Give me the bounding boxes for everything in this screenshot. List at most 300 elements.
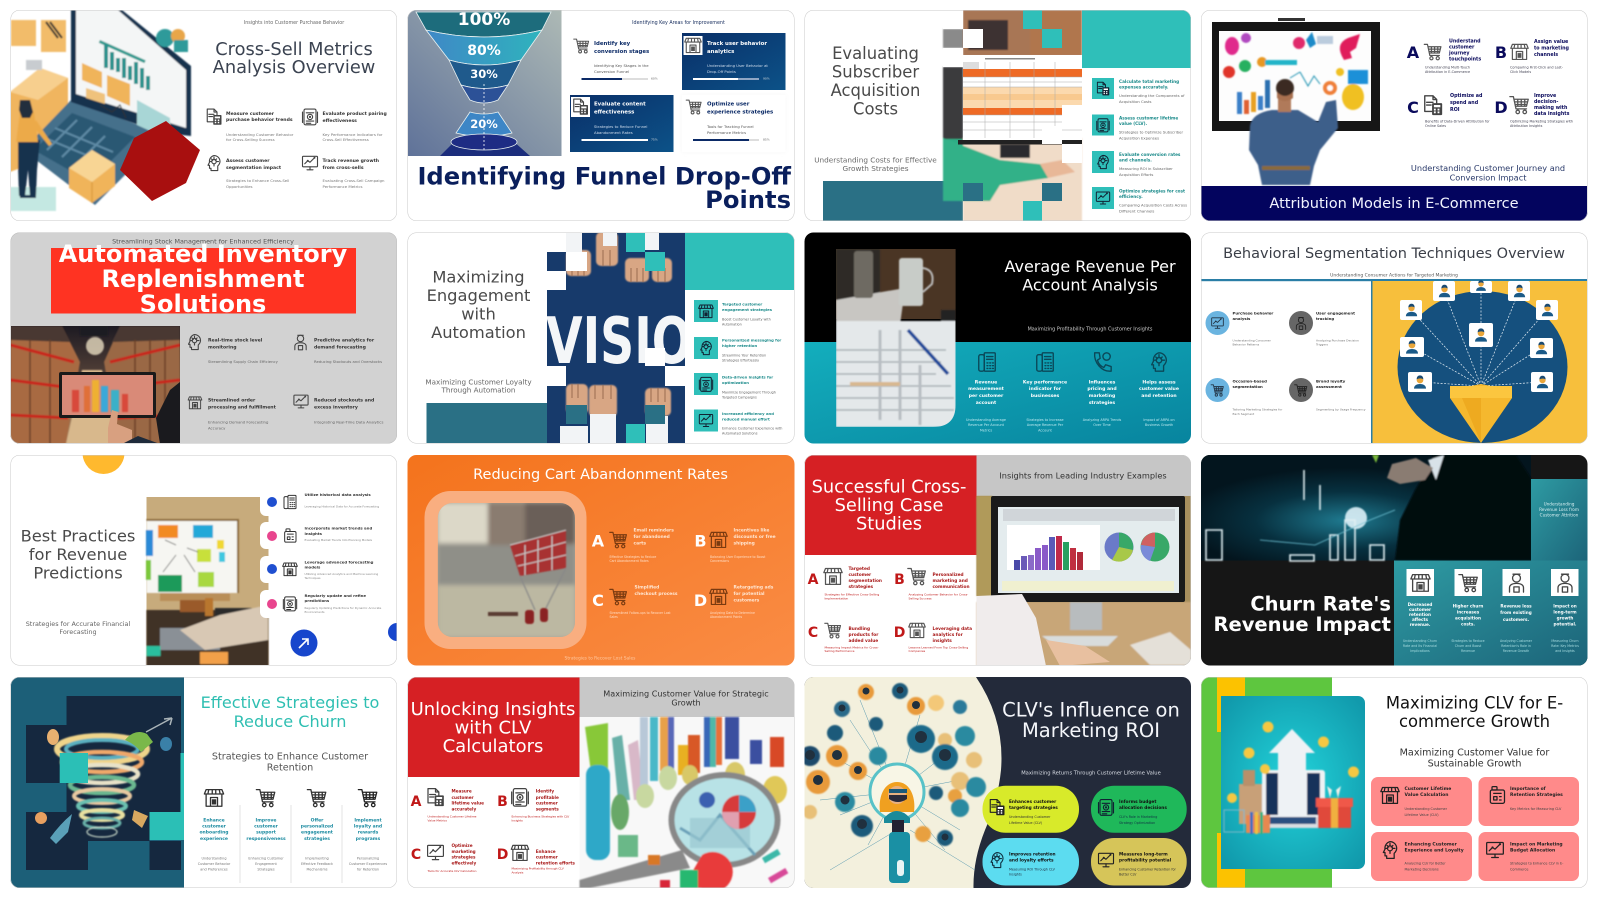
panel: user experience strategies: 85%: [763, 138, 770, 142]
panel: churn effects: from existing: [1500, 610, 1532, 615]
slide card: Behavioral Segmentation Techniques Overview: [1201, 232, 1588, 444]
list: acquisition cost actions: Evaluate conversion rates: [1119, 152, 1181, 157]
item A: journey touchpoints: journey: [1448, 50, 1470, 56]
title: Subscriber: [832, 62, 919, 82]
column: onboarding: Understanding: [202, 856, 226, 860]
panel: conversion stages: conversion stages: [594, 49, 649, 55]
item: order processing: [188, 397, 277, 430]
column: engagement: personalized: [301, 824, 333, 830]
item B: personalized marketing: Personalized: [932, 572, 964, 578]
pill: budget allocation: [1091, 786, 1187, 833]
title: Average Revenue Per: [1004, 257, 1176, 276]
panel: budget allocation: Impact on Marketing: [1510, 842, 1563, 848]
item: occasion segmentation: Occasion-based: [1232, 378, 1267, 384]
title: Identifying Funnel Drop-Off: [417, 162, 791, 190]
title block: Studies: [856, 514, 922, 534]
list: acquisition cost actions: Acquisition Costs: [1119, 99, 1151, 104]
subtitle: Understanding Costs for Effective: [814, 156, 937, 164]
item B: personalized marketing: B: [894, 572, 905, 588]
photo: analyst at monitor with charts: [976, 496, 1192, 666]
column: key performance indicator: Average Revenue Per: [1027, 423, 1064, 427]
pill: budget allocation: CLV's Role in Marketing: [1119, 815, 1157, 819]
column: engagement: Offer: [311, 818, 324, 824]
list: forecasting practices: insights: [304, 531, 323, 536]
item: purchase behavior: [1206, 310, 1273, 346]
item: segmentation impact: segmentation impact: [226, 165, 282, 171]
item B: incentives: Conversions: [710, 559, 729, 563]
item B: channel value: Click Models: [1510, 70, 1531, 74]
subtitle: [1412, 165, 1564, 182]
panel: user behavior analytics: [682, 33, 786, 90]
list: acquisition cost actions: Comparing Acquisition Costs Across: [1119, 202, 1187, 208]
column: loyalty: for Retention: [357, 868, 379, 872]
title: Maximizing: [432, 268, 525, 286]
column: revenue measurement: Understanding Average: [966, 418, 1006, 422]
panel: customer experience: Enhancing Customer: [1404, 842, 1458, 848]
subtitle block: Growth: [671, 698, 701, 708]
panel: budget allocation: Budget Allocation: [1510, 848, 1555, 854]
title block: [408, 677, 580, 777]
subtitle: Sustainable Growth: [1428, 758, 1521, 770]
item D: retention efforts: [497, 845, 575, 874]
title block: with CLV: [455, 718, 532, 738]
pill: long-term profitability: Enhancing Customer Retention for: [1119, 868, 1177, 872]
subtitle: Strategies to Enhance Customer: [212, 752, 368, 762]
shape: teal corner block: [685, 232, 795, 290]
panel: subtitle: Revenue Loss from: [1539, 507, 1579, 512]
item: occasion segmentation: [1206, 378, 1283, 416]
item D: data analytics: Lessons Learned From Top Cross-Selling: [908, 646, 968, 650]
column: revenue measurement: Revenue: [975, 380, 997, 386]
column: customer value: Impact of ARPA on: [1143, 418, 1175, 422]
panel: churn effects: acquisition: [1455, 616, 1481, 620]
item D: retention efforts: Enhance: [536, 849, 556, 854]
item D: decision making: making with: [1534, 105, 1568, 111]
item C: bundling: added value: [848, 638, 878, 644]
list: forecasting practices: Regularly update and refine: [304, 593, 366, 598]
icon: documents: [207, 109, 222, 125]
column: loyalty: rewards: [358, 830, 379, 836]
item A: email reminders: carts: [634, 540, 646, 546]
item: purchase behavior trends: Measure customer: [226, 111, 275, 117]
panel: content effectiveness: [570, 95, 674, 152]
pill: targeting strategies: [982, 786, 1079, 833]
item C: marketing strategies: Tools for Accurate CLV Calculation: [426, 869, 477, 873]
column: loyalty: loyalty and: [354, 824, 382, 830]
column: pricing strategies: Analyzing ARPA Trends: [1083, 418, 1121, 422]
column: onboarding: onboarding: [199, 830, 229, 836]
list: acquisition cost actions: efficiency.: [1119, 194, 1143, 199]
photo: warehouse with tablet: [10, 326, 180, 444]
title: [21, 526, 135, 582]
title: [420, 166, 792, 208]
item: segmentation impact: [226, 158, 289, 189]
item B: profitable segments: segments: [536, 806, 559, 812]
item: engagement tracking: Analyzing Purchase Decision: [1316, 338, 1359, 342]
panel: churn effects: Implications: [1410, 649, 1430, 653]
column: support: Enhancing Customer: [248, 856, 284, 860]
subtitle: Understanding Consumer Actions for Targeted Marketing: [1330, 272, 1458, 278]
item C: simplified checkout: Streamlined Follow-ups to Recover Lost: [610, 611, 671, 615]
panel: customer experience: Experience and Loyalty: [1404, 848, 1464, 854]
item: brand loyalty: assessment: [1316, 384, 1342, 389]
panel: churn effects: retention: [1409, 612, 1431, 617]
item: revenue growth: [322, 158, 385, 189]
panel: churn effects: growth: [1557, 616, 1573, 620]
panel: conversion stages: [573, 38, 658, 80]
panel: churn effects: Revenue loss: [1500, 604, 1532, 608]
subtitle: Retention: [267, 762, 313, 774]
item C: bundling: C: [808, 625, 818, 641]
item A: email reminders: Email reminders: [634, 528, 674, 534]
photo: planning whiteboard and laptop: [146, 497, 268, 666]
slide card: Cross-Sell Metrics Analysis Overview: [10, 10, 397, 221]
item D: retargeting ads: for potential: [734, 591, 765, 597]
item A: email reminders: for abandoned: [634, 534, 670, 540]
item B: personalized marketing: communication: [932, 584, 970, 590]
item A: email reminders: Cart Abandonment Rates: [610, 559, 649, 563]
list: automation benefits: Boost Customer Loyalty with: [722, 318, 771, 322]
column: loyalty: Customer Experiences: [349, 862, 387, 866]
title: Reduce Churn: [234, 712, 346, 731]
item: purchase behavior: analysis: [1232, 316, 1251, 321]
list: automation benefits: higher retention: [722, 343, 757, 348]
column: onboarding: experience: [200, 836, 228, 842]
item: demand forecasting: demand forecasting: [314, 344, 366, 350]
column: onboarding: Customer Behavior: [198, 862, 231, 866]
item D: retention efforts: customer: [536, 854, 559, 860]
list: forecasting practices: Leverage advanced forecasting: [304, 560, 374, 564]
item D: retargeting ads: [694, 584, 774, 619]
item: product pairing: [322, 111, 387, 142]
item B: channel value: Assign value: [1534, 39, 1569, 45]
title block: [804, 455, 976, 555]
item: reduced stockouts: [294, 395, 383, 424]
item A: journey touchpoints: [1407, 38, 1481, 74]
item A: lifetime value: [411, 788, 484, 822]
slide card: Churn Rate's Revenue Impact: [1201, 455, 1588, 666]
list: acquisition cost actions: Calculate total marketing: [1119, 79, 1179, 84]
item D: retargeting ads: Analyzing Data to Determine: [710, 611, 755, 615]
column: key performance indicator: Strategies to Increase: [1026, 418, 1064, 422]
list: forecasting practices: Leveraging Historical Data for Accurate Forecasting: [304, 504, 379, 508]
item: product pairing: effectiveness: [322, 118, 357, 124]
subtitle: [1400, 748, 1549, 770]
item A: journey touchpoints: Attribution in E-Commerce: [1425, 70, 1470, 74]
item B: profitable segments: profitable: [536, 795, 559, 800]
pill: long-term profitability: Better CLV: [1119, 872, 1137, 876]
subtitle block: [976, 455, 1192, 496]
list: automation benefits: Personalized messaging for: [722, 338, 781, 342]
panel: content effectiveness: Abandonment Rates: [594, 130, 633, 135]
title: Costs: [853, 100, 898, 118]
illustration: upward arrow, laptop and gifts: [1201, 677, 1365, 888]
panel: conversion stages: Identify key: [594, 41, 631, 47]
subtitle: Maximizing Profitability Through Customer Insights: [1028, 326, 1153, 332]
panel: user experience strategies: Tools for Tracking Funnel: [706, 124, 754, 129]
item C: bundling: Selling Performance: [824, 649, 855, 653]
item: purchase behavior: Purchase behavior: [1232, 310, 1273, 316]
pill: long-term profitability: profitability potential: [1119, 858, 1172, 864]
title: with: [461, 304, 496, 324]
column: key performance indicator: indicator for: [1029, 386, 1062, 392]
item: product pairing: Key Performance Indicators for: [322, 132, 383, 137]
photo: VISION table with hands: VISIO: [546, 305, 692, 379]
panel: churn effects: potential.: [1554, 622, 1577, 626]
panel: budget allocation: Commerce: [1510, 868, 1528, 872]
list: forecasting practices: models: [304, 564, 321, 570]
column: onboarding: [198, 790, 231, 872]
panel: churn effects: Understanding Churn: [1403, 639, 1437, 643]
title: Engagement: [427, 286, 530, 305]
item: reduced stockouts: Integrating Real-Time Data Analytics: [314, 420, 383, 424]
shape: red hexagon: [120, 121, 200, 201]
item C: ad spend: [1407, 93, 1490, 128]
item: stock monitoring: [188, 334, 279, 364]
item C: marketing strategies: marketing: [452, 849, 476, 854]
illustration: isometric laptop analytics scene: [10, 10, 191, 211]
column: engagement: Effective Feedback: [301, 862, 333, 866]
list: forecasting practices: Regularly Updating Predictions for Dynamic Accurate: [304, 606, 381, 610]
column: support: customer: [254, 824, 279, 830]
item: order processing: Enhancing Demand Forecasting: [208, 420, 269, 424]
title: [831, 44, 920, 118]
title: Maximizing CLV for E-: [1386, 694, 1563, 712]
item: order processing: Streamlined order: [208, 398, 256, 404]
item C: ad spend: Optimize ad: [1450, 93, 1483, 99]
item B: profitable segments: [497, 788, 569, 822]
chart: funnel with percentages: [408, 10, 562, 156]
title bar: [1201, 186, 1588, 221]
item: occasion segmentation: Each Segment: [1232, 412, 1255, 416]
panel: retention strategies: Importance of: [1510, 786, 1546, 792]
photo: coloured bars and magnifying glass: [580, 717, 794, 892]
column: customer value: [1139, 353, 1179, 427]
item: stock monitoring: Real-time stock level: [208, 338, 263, 344]
photo: businessman and glowing city chart: [1201, 455, 1531, 561]
subtitle: Streamlining Stock Management for Enhanced Efficiency: [112, 238, 294, 246]
subtitle: Conversion Impact: [1450, 172, 1527, 182]
slide card: Reducing Cart Abandonment Rates: [408, 455, 794, 666]
panel: churn effects: customer: [1409, 607, 1432, 612]
icon: chart monitor: [302, 156, 318, 170]
title banner: Solutions: [140, 290, 266, 318]
list: acquisition cost actions: Acquisition Efforts: [1119, 172, 1153, 177]
item: purchase behavior trends: for Cross-Selling Success: [226, 137, 275, 142]
item D: retargeting ads: customers: [734, 598, 760, 604]
item: segmentation impact: Strategies to Enhance Cross-Sell: [226, 178, 289, 183]
item A: segmentation: segmentation: [848, 578, 882, 584]
panel: churn effects: customers.: [1503, 617, 1530, 622]
item C: simplified checkout: Simplified: [634, 584, 659, 590]
item D: retention efforts: Maximizing Profitability through CLV: [512, 866, 564, 870]
item B: channel value: channels: [1534, 52, 1558, 58]
panel: churn effects: Measuring Churn: [1551, 639, 1579, 643]
icon: board: [302, 109, 318, 125]
item B: incentives: Balancing User Experience to Boost: [710, 555, 766, 559]
item A: journey touchpoints: Understanding Multi-Touch: [1425, 66, 1470, 70]
item A: journey touchpoints: A: [1407, 43, 1420, 62]
panel: retention strategies: Key Metrics for Measuring CLV: [1510, 807, 1562, 811]
item B: channel value: to marketing: [1534, 46, 1570, 52]
item D: decision making: D: [1494, 98, 1508, 117]
item A: segmentation: Targeted: [848, 566, 870, 572]
list: automation benefits: Automated Solutions: [722, 432, 758, 436]
column: customer value: Helps assess: [1142, 380, 1176, 386]
list: acquisition cost actions: and channels.: [1119, 158, 1152, 162]
panel: churn effects: long-term: [1553, 610, 1577, 614]
subtitle block: Insights from Leading Industry Examples: [999, 470, 1167, 480]
item C: marketing strategies: C: [411, 847, 421, 863]
item C: bundling: products for: [848, 632, 879, 638]
item A: lifetime value: Understanding Customer Lifetime: [428, 814, 477, 818]
item D: decision making: Improve: [1534, 93, 1557, 99]
item C: bundling: [808, 623, 879, 653]
list: acquisition cost actions: [1092, 78, 1187, 214]
column: revenue measurement: per customer: [969, 393, 1004, 399]
item: revenue growth: from cross-sells: [322, 165, 364, 171]
panel: lifetime value calculation: [1371, 777, 1472, 826]
column: pricing strategies: pricing and: [1087, 386, 1117, 392]
item B: personalized marketing: Analyzing Customer Behavior for Cross-: [908, 592, 968, 596]
column: revenue measurement: measurement: [968, 386, 1005, 392]
item: brand loyalty: Segmenting by Usage Frequency: [1316, 408, 1366, 412]
column: onboarding: customer: [202, 824, 227, 830]
column: onboarding: Enhance: [203, 818, 225, 824]
item C: simplified checkout: [592, 584, 678, 619]
photo frame: [424, 491, 586, 649]
item A: segmentation: A: [808, 572, 819, 588]
item C: ad spend: ROI: [1450, 107, 1460, 113]
slide card: CLV's Influence on Marketing ROI: [800, 677, 1191, 888]
shape: teal corner block: [1082, 10, 1191, 68]
list: acquisition cost actions: value (CLV).: [1119, 121, 1148, 126]
slide card: Unlocking Insights with CLV Calculators: [408, 677, 794, 892]
title: Predictions: [33, 564, 123, 582]
item A: lifetime value: Value Metrics: [428, 818, 447, 822]
title block: Calculators: [443, 736, 543, 757]
item D: retention efforts: D: [497, 847, 508, 863]
item B: personalized marketing: marketing and: [932, 578, 968, 584]
list: acquisition cost actions: Optimize strategies for cost: [1119, 188, 1185, 194]
slide card: Identifying Funnel Drop-Off Points: [408, 10, 794, 221]
item B: personalized marketing: [894, 568, 970, 600]
panel: user behavior analytics: Drop-Off Points: [707, 69, 736, 74]
item: purchase behavior trends: [226, 111, 294, 142]
panel: user experience strategies: experience strategies: [707, 110, 773, 116]
title: Evaluating: [832, 44, 919, 63]
column: loyalty: Implement: [354, 818, 382, 824]
item: purchase behavior: Behavior Patterns: [1232, 342, 1260, 346]
subtitle: [212, 752, 368, 774]
title: Churn Rate's: [1250, 592, 1391, 616]
item: purchase behavior trends: Understanding Customer Behavior: [226, 132, 294, 137]
item A: segmentation: customer: [848, 572, 872, 578]
slide card: Automated Inventory Replenishment Solutions: [10, 232, 397, 444]
photo: man at touch screen: [1212, 18, 1380, 185]
item D: decision making: Attribution Insights: [1510, 124, 1543, 128]
illustration: customer network with magnifier person: [800, 677, 1001, 888]
footer caption: Strategies to Recover Lost Sales: [565, 656, 636, 662]
item C: bundling: Bundling: [848, 626, 870, 632]
pill: budget allocation: allocation decisions: [1119, 805, 1167, 811]
panel: churn effects: revenue.: [1410, 622, 1431, 627]
item C: ad spend: Benefits of Data-Driven Attribution for: [1425, 120, 1490, 124]
item: engagement tracking: User engagement: [1316, 310, 1355, 316]
pill: retention efforts: Improves retention: [1009, 852, 1056, 858]
item C: ad spend: C: [1407, 98, 1419, 117]
title: Best Practices: [21, 526, 135, 546]
item D: data analytics: analytics for: [932, 632, 964, 638]
title: for Revenue: [29, 545, 127, 564]
panel: user experience strategies: Optimize user: [707, 102, 750, 108]
item B: channel value: Comparing First-Click and Last-: [1510, 66, 1564, 70]
panel: conversion stages: Conversion Funnel: [594, 69, 629, 74]
title: [1386, 694, 1563, 731]
item: order processing: processing and fulfillment: [208, 404, 277, 410]
list: automation benefits: Enhance Customer Experience with: [722, 426, 782, 430]
item: stock monitoring: Streamlining Supply Chain Efficiency: [208, 359, 279, 364]
column: key performance indicator: [1023, 353, 1067, 432]
column: loyalty: [349, 790, 387, 872]
panel: churn effects: Rate and Its Financial: [1403, 644, 1437, 648]
title: Marketing ROI: [1022, 719, 1160, 742]
title: Cross-Sell Metrics: [215, 39, 373, 60]
title banner: [51, 244, 356, 314]
column: key performance indicator: businesses: [1031, 393, 1060, 399]
item A: journey touchpoints: customer: [1449, 44, 1475, 50]
panel: churn effects: increases: [1457, 610, 1480, 614]
title: Acquisition: [831, 81, 920, 100]
pill: retention efforts: and loyalty efforts: [1009, 858, 1054, 864]
list: automation benefits: [694, 300, 782, 436]
title: Reducing Cart Abandonment Rates: [473, 467, 728, 483]
list: automation benefits: Streamline Your Retention: [722, 354, 766, 358]
column: loyalty: Personalizing: [357, 856, 379, 860]
item: demand forecasting: Reducing Stockouts and Overstocks: [314, 359, 382, 364]
panel: budget allocation: Strategies to Enhance CLV in E-: [1510, 862, 1564, 866]
panel: customer experience: Analyzing CLV for Better: [1404, 862, 1446, 866]
item B: incentives: Incentives like: [734, 528, 769, 534]
item B: incentives: B: [694, 532, 707, 550]
list: forecasting practices: Environments: [304, 610, 325, 614]
item D: data analytics: D: [894, 625, 905, 641]
panel: lifetime value calculation: Customer Lifetime: [1404, 786, 1451, 792]
title banner: Automated Inventory: [59, 240, 348, 268]
item: engagement tracking: [1289, 310, 1359, 346]
pill: targeting strategies: Lifetime Value (CLV): [1009, 821, 1042, 825]
panel: churn effects: affects: [1412, 617, 1429, 622]
item: revenue growth: Track revenue growth: [322, 158, 379, 164]
panel: lifetime value calculation: Understanding Customer: [1404, 807, 1448, 811]
title: [427, 268, 530, 342]
item: stock monitoring: monitoring: [208, 344, 237, 350]
item B: channel value: B: [1495, 43, 1507, 62]
title: Automation: [431, 323, 526, 342]
item A: segmentation: Strategies for Effective Cross-Selling: [824, 592, 879, 596]
title: CLV's Influence on: [1002, 698, 1180, 722]
item C: simplified checkout: C: [592, 591, 604, 610]
item: revenue growth: Evaluating Cross-Sell Campaign: [322, 178, 385, 183]
panel: user behavior analytics: Track user behavior: [707, 41, 767, 47]
chart: funnel with percentages: 100%: [458, 10, 510, 30]
column: engagement: Mechanisms: [306, 868, 328, 872]
pill: targeting strategies: targeting strategies: [1009, 805, 1058, 811]
list: automation benefits: engagement strategies: [722, 307, 773, 312]
subtitle: Insights into Customer Purchase Behavior: [244, 20, 344, 26]
illustration: colourful funnel on dark cross: [10, 677, 184, 888]
photo: spreadsheet on monitor: [943, 10, 1082, 221]
